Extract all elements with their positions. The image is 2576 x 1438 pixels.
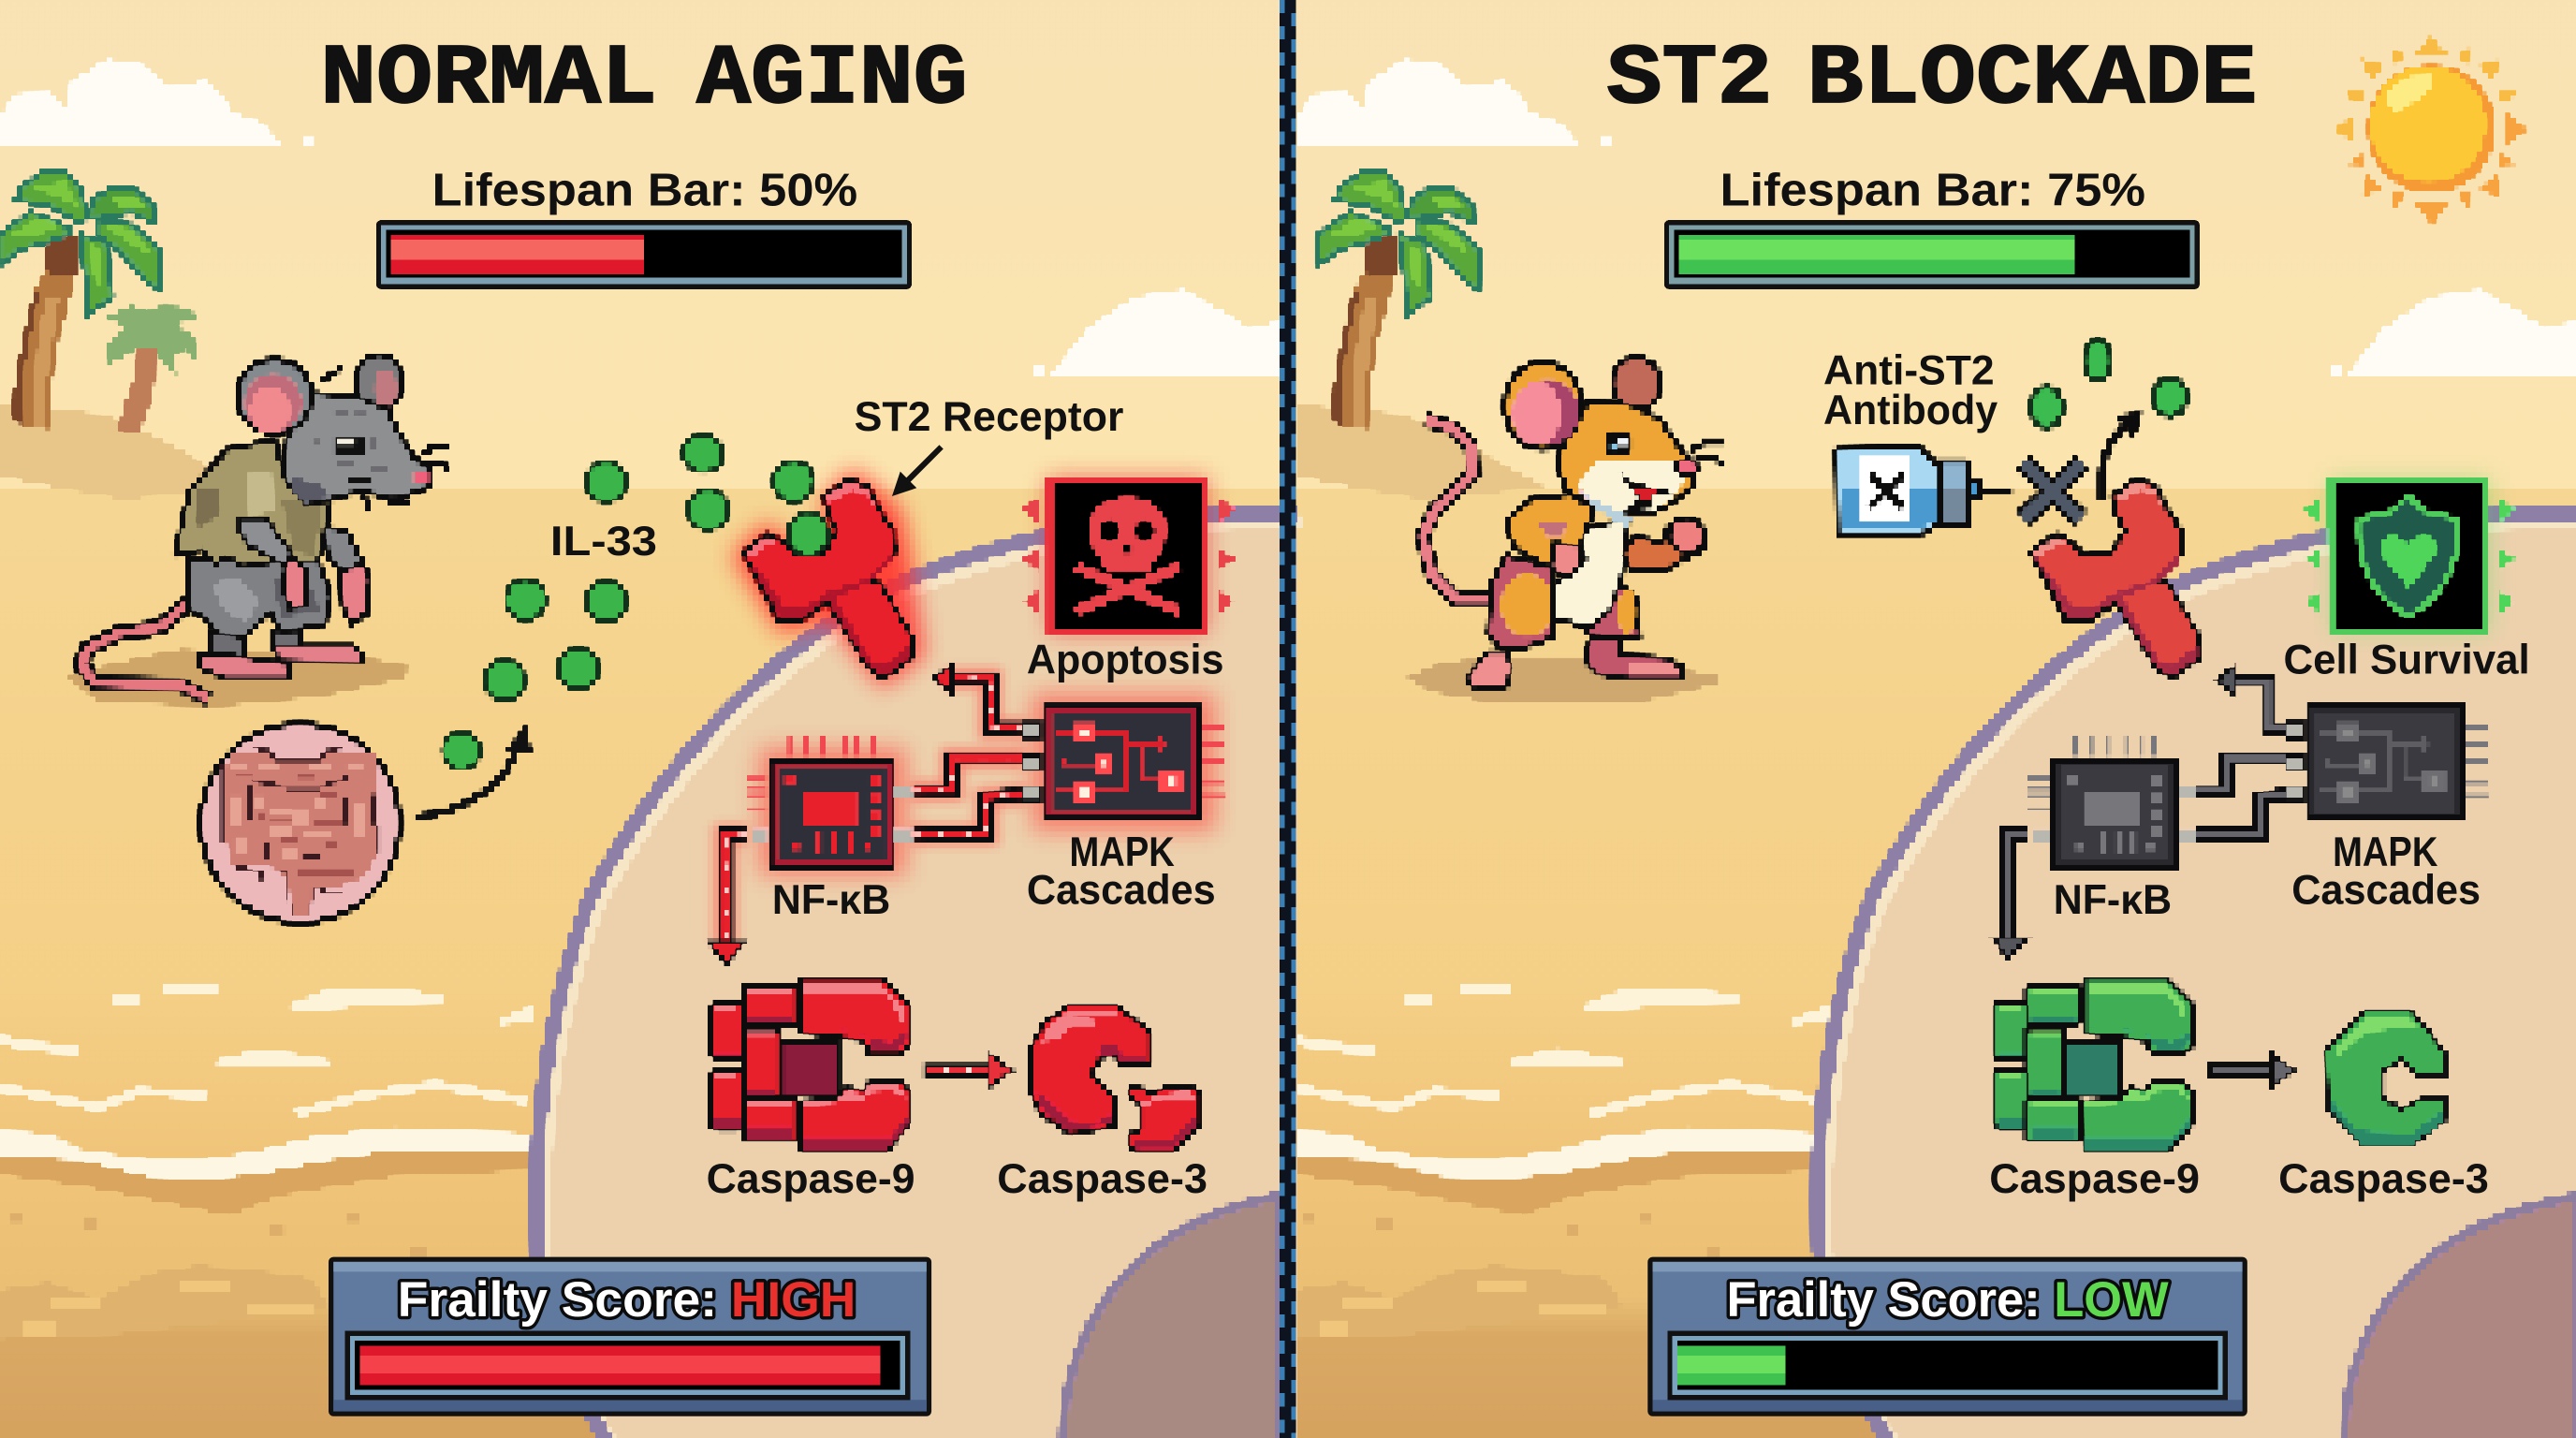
panel: frailty score low xyxy=(1647,1257,2247,1416)
label: MAPK cascades: MAPK xyxy=(1070,829,1175,875)
label: MAPK cascades: Cascades xyxy=(1027,866,1216,913)
arrow: caspase-9 to caspase-3 red xyxy=(923,1053,1012,1088)
gauge: lifespan 75% xyxy=(1664,220,2200,289)
panel: ST2 blockade xyxy=(1319,32,2576,1438)
caspase-3: intact xyxy=(2324,1010,2448,1145)
label: IL-33: IL-33 xyxy=(550,518,657,565)
label: anti-ST2 antibody: Antibody xyxy=(1823,387,1998,433)
signal wires: red xyxy=(710,665,1025,964)
clouds xyxy=(0,59,2576,374)
IL-33 particles deflected xyxy=(2031,341,2187,427)
labels and gauges: ST2 blockade xyxy=(1606,32,2530,1416)
cell: membrane and cytoplasm xyxy=(536,514,1304,1438)
label: MAPK cascades: Cascades xyxy=(2291,866,2481,913)
text: lifespan bar label: Lifespan Bar: 75% xyxy=(1720,165,2145,215)
caspase-9: green xyxy=(1994,978,2193,1152)
label: caspase-9: Caspase-9 xyxy=(707,1155,915,1202)
title xyxy=(320,32,968,128)
label: ST2 receptor xyxy=(855,393,1123,496)
mouse: aged grey rat xyxy=(68,355,450,707)
illustrations: ST2 blockade xyxy=(1319,35,2576,1438)
label: MAPK cascades xyxy=(1027,829,1216,913)
panel: normal aging xyxy=(0,32,1304,1438)
cell: membrane and cytoplasm xyxy=(1818,514,2576,1438)
label: cell survival: Cell Survival xyxy=(2283,637,2530,683)
labels and gauges: normal aging xyxy=(320,32,1223,1416)
icon: cell survival shield xyxy=(2305,478,2515,633)
ST2 receptor: activated xyxy=(733,470,925,688)
label: caspase-3: Caspase-3 xyxy=(997,1155,1208,1202)
shoreline waves and sand xyxy=(0,986,1837,1339)
chip: NF-kB xyxy=(746,735,913,875)
illustrations: normal aging xyxy=(0,171,1304,1438)
chip: MAPK xyxy=(1021,694,1227,831)
arrow: deflection xyxy=(2101,412,2142,501)
icon: apoptosis skull xyxy=(1022,478,1236,633)
label: apoptosis: Apoptosis xyxy=(1027,637,1223,683)
icon: gut in circle xyxy=(201,724,400,922)
label: ST2 receptor: ST2 Receptor xyxy=(855,393,1123,440)
chip: MAPK inactive xyxy=(2285,704,2491,820)
signal wires: inactive xyxy=(1993,667,2288,958)
chip: NF-kB inactive xyxy=(2029,735,2195,869)
title: BLOCKADE xyxy=(1807,32,2257,128)
label: caspase-9: Caspase-9 xyxy=(1989,1155,2200,1202)
title xyxy=(1606,32,2257,128)
caspase-9: red xyxy=(711,978,910,1152)
label: anti-ST2 antibody: Anti-ST2 xyxy=(1823,347,1995,394)
gauge: frailty low xyxy=(1667,1331,2228,1400)
IL-33 particles xyxy=(444,435,813,769)
arrow: gut to IL-33 xyxy=(414,726,533,816)
icon: anti-ST2 antibody vial xyxy=(1837,447,2012,534)
icon: sun xyxy=(2335,35,2527,225)
label: MAPK cascades xyxy=(2291,829,2481,913)
text: frailty score: Frailty Score: HIGH xyxy=(398,1272,856,1328)
mouse: healthy orange xyxy=(1407,358,1722,702)
divider xyxy=(1280,0,1296,1438)
ST2 receptor: blocked xyxy=(2031,479,2200,679)
label: NF-kB: NF-κB xyxy=(772,876,890,923)
label: MAPK cascades: MAPK xyxy=(2333,829,2437,875)
title: ST2 xyxy=(1606,32,1773,128)
nucleus xyxy=(2344,1196,2576,1438)
palm tree xyxy=(1319,171,1480,429)
icon: block X xyxy=(2024,463,2081,518)
title: AGING xyxy=(696,32,968,128)
sand dunes xyxy=(0,404,1547,500)
panel: frailty score high xyxy=(329,1257,931,1416)
label: anti-ST2 antibody xyxy=(1823,347,1998,433)
label: caspase-3: Caspase-3 xyxy=(2278,1155,2489,1202)
caspase-3: cleaved xyxy=(1032,1005,1201,1152)
nucleus xyxy=(1062,1196,1278,1438)
gauge: lifespan 50% xyxy=(376,220,912,289)
text: lifespan bar label: Lifespan Bar: 50% xyxy=(432,165,857,215)
arrow: caspase-9 to caspase-3 inactive xyxy=(2206,1053,2293,1088)
gauge: frailty high xyxy=(345,1331,910,1400)
title: NORMAL xyxy=(320,32,657,128)
label: NF-kB: NF-κB xyxy=(2054,876,2172,923)
palm trees xyxy=(0,171,198,433)
text: frailty score: Frailty Score: LOW xyxy=(1727,1272,2169,1328)
